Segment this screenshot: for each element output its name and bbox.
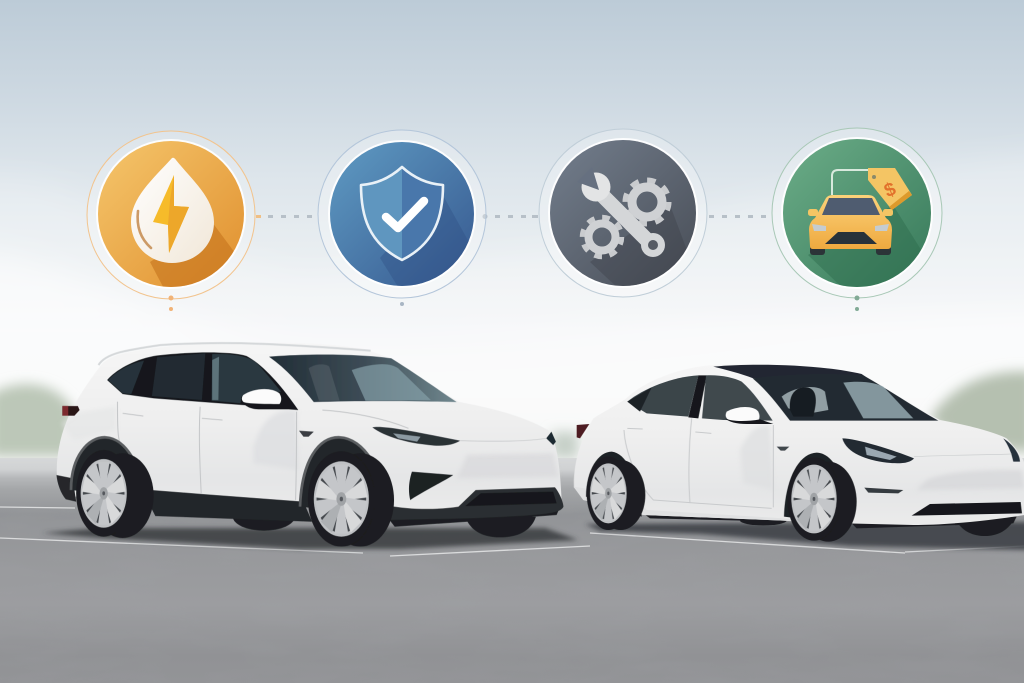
roof rails [99, 343, 371, 365]
door lines and handles [117, 402, 409, 500]
windshield [753, 374, 938, 421]
lower cladding [142, 489, 312, 522]
front wheel [308, 451, 394, 547]
connector: energy to safety [256, 215, 312, 218]
parking lot ground [0, 458, 1024, 683]
icon part: price tag [868, 168, 912, 210]
icon: price tag and car [772, 128, 942, 311]
sky background [0, 0, 1024, 470]
grille [912, 502, 1022, 516]
nose badge line [546, 432, 556, 445]
fog light intake [409, 472, 453, 500]
icon part: gear right [626, 180, 668, 224]
car: white sedan [573, 364, 1024, 542]
windshield [269, 355, 457, 402]
icon part: price tag: $ [881, 179, 899, 202]
mirror [726, 407, 760, 422]
tail light [577, 424, 589, 438]
rear wheel [76, 450, 154, 538]
underbody and far-side wheels [233, 503, 560, 537]
headlight [372, 427, 460, 446]
icon part: yellow car [808, 195, 893, 255]
charge port [299, 431, 314, 437]
fog light [864, 488, 903, 493]
front wheel [787, 457, 857, 542]
tail light [62, 406, 80, 416]
wheel arches [586, 452, 642, 517]
background trees [0, 371, 1024, 458]
underbody and far-side wheels [643, 513, 1017, 536]
clouds [0, 150, 1024, 430]
sill [573, 487, 843, 525]
asphalt texture [0, 485, 1024, 683]
door lines and handles [624, 418, 773, 508]
wheel arches [71, 437, 143, 497]
icon: maintenance wrench and gears [539, 129, 707, 297]
roof panel [713, 365, 870, 380]
parking lines [0, 507, 1024, 556]
connector: safety to maintenance [482, 214, 538, 219]
hood and bumper shading [740, 425, 1024, 490]
side windows [107, 352, 298, 410]
rear wheel [587, 457, 645, 530]
body shell [57, 343, 562, 513]
charge port handle [777, 447, 789, 451]
side windows [627, 375, 698, 417]
icon: energy drop with lightning bolt [87, 131, 270, 311]
icon part: wrench [577, 167, 665, 257]
body shell [574, 364, 1024, 525]
headlight [842, 438, 914, 463]
lower bumper [384, 487, 563, 520]
body shading [61, 407, 558, 478]
lower sill [57, 475, 76, 502]
icon part: gear left [582, 218, 622, 256]
hood edge [914, 454, 1012, 457]
mirror [242, 389, 281, 405]
icon: safety shield with check [318, 130, 490, 306]
car shadows [42, 522, 1024, 550]
car: white SUV [57, 343, 563, 547]
connector: maintenance to price [709, 215, 766, 218]
